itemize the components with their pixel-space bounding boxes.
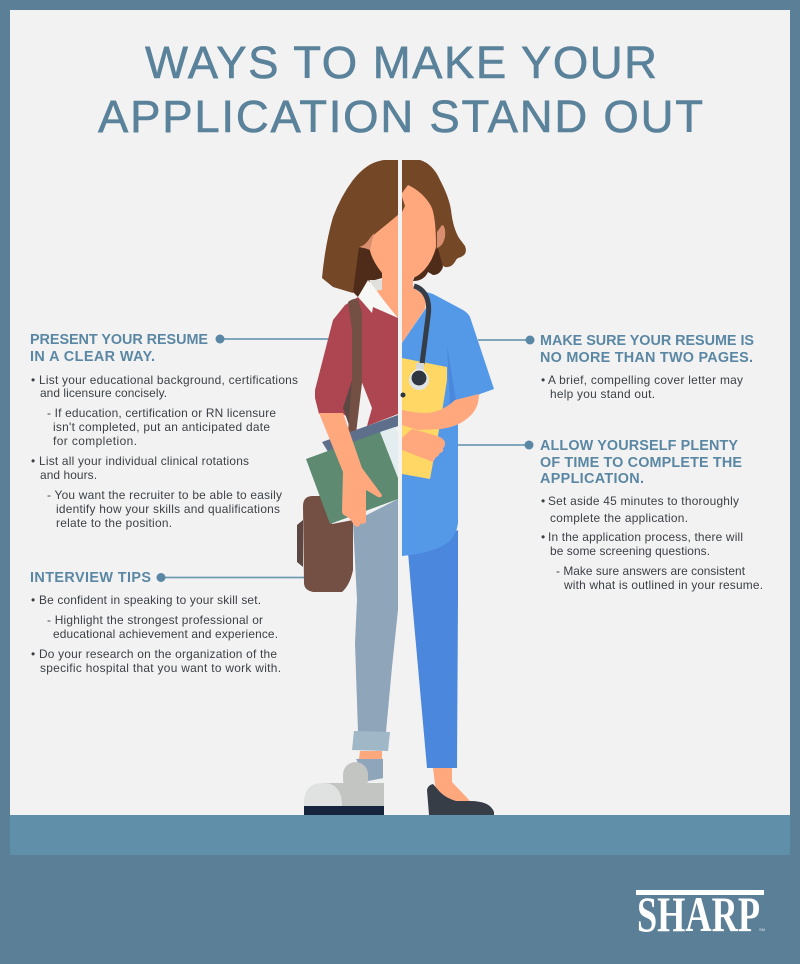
- text block: present your resume: and hours.: [40, 468, 97, 482]
- ear: [437, 225, 445, 248]
- face and neck: [402, 185, 436, 343]
- connector: interview tips: [156, 573, 304, 582]
- hair lock: [402, 197, 405, 212]
- text block: interview tips: •: [31, 593, 35, 607]
- connector: two pages: [478, 336, 534, 344]
- text block: plenty of time: APPLICATION.: [540, 471, 644, 487]
- scrub top: [402, 288, 494, 556]
- text block: present your resume: [30, 332, 298, 530]
- text block: present your resume: identify how your skills and qualifications: [56, 502, 280, 516]
- text block: interview tips: educational achievement and experience.: [53, 627, 278, 641]
- student half: [297, 160, 398, 815]
- text block: two pages: [540, 333, 754, 401]
- text block: plenty of time: •: [541, 494, 545, 508]
- title: [98, 37, 703, 142]
- text block: interview tips: [30, 570, 281, 675]
- arm and hand: [319, 413, 382, 527]
- text block: plenty of time: Set aside 45 minutes to thoroughly: [548, 494, 739, 508]
- pants: [408, 530, 458, 768]
- text block: plenty of time: be some screening questions.: [550, 544, 710, 558]
- bag: [297, 496, 353, 592]
- text block: two pages: NO MORE THAN TWO PAGES.: [540, 350, 753, 366]
- text block: present your resume: relate to the position.: [56, 516, 172, 530]
- title: APPLICATION STAND OUT: [98, 91, 703, 142]
- text block: present your resume: •: [31, 454, 35, 468]
- text block: two pages: •: [541, 373, 545, 387]
- foot: [433, 768, 470, 806]
- text block: present your resume: isn't completed, put an anticipated date: [53, 420, 270, 434]
- text block: plenty of time: complete the application.: [550, 511, 688, 525]
- text block: interview tips: Do your research on the organization of the: [39, 647, 277, 661]
- figure: half student, half nurse: [297, 160, 494, 815]
- text block: plenty of time: ALLOW YOURSELF PLENTY: [540, 438, 738, 454]
- text block: present your resume: - You want the recruiter to be able to easily: [47, 488, 282, 502]
- text block: interview tips: specific hospital that you want to work with.: [40, 661, 281, 675]
- text block: present your resume: for completion.: [53, 434, 137, 448]
- flat shoe: [427, 784, 494, 815]
- text block: present your resume: List all your individual clinical rotations: [39, 454, 249, 468]
- text block: plenty of time: with what is outlined in your resume.: [563, 578, 763, 592]
- jeans: [353, 499, 398, 732]
- hand: [402, 429, 445, 462]
- text block: present your resume: IN A CLEAR WAY.: [30, 349, 155, 365]
- rolled cuff: [352, 731, 390, 751]
- text block: interview tips: •: [31, 647, 35, 661]
- collar: [358, 280, 397, 318]
- text block: two pages: help you stand out.: [550, 387, 655, 401]
- hair: [402, 160, 466, 267]
- connector: resume clear way: [216, 334, 332, 344]
- text block: present your resume: PRESENT YOUR RESUME: [30, 332, 208, 348]
- clipboard: [402, 358, 447, 479]
- text block: interview tips: - Highlight the strongest professional or: [47, 613, 263, 627]
- text block: interview tips: INTERVIEW TIPS: [30, 570, 151, 586]
- hair: [322, 160, 398, 293]
- books: [306, 415, 398, 524]
- logo: Sharp: SM: [759, 927, 765, 932]
- title: WAYS TO MAKE YOUR: [145, 37, 657, 88]
- text block: present your resume: and licensure concisely.: [40, 386, 167, 400]
- text block: plenty of time: In the application process, there will: [548, 530, 743, 544]
- text block: two pages: MAKE SURE YOUR RESUME IS: [540, 333, 754, 349]
- text block: plenty of time: - Make sure answers are consistent: [556, 564, 746, 578]
- floor band: [10, 815, 790, 855]
- text block: plenty of time: [540, 438, 763, 592]
- strap: [343, 299, 362, 442]
- neck and face: [369, 215, 398, 318]
- stethoscope: [409, 286, 429, 390]
- text block: plenty of time: •: [541, 530, 545, 544]
- sneaker: [304, 751, 384, 815]
- folded arm: [402, 394, 479, 430]
- text block: present your resume: - If education, certification or RN licensure: [47, 406, 276, 420]
- sweater: [315, 297, 398, 426]
- text block: interview tips: Be confident in speaking to your skill set.: [39, 593, 261, 607]
- text block: two pages: A brief, compelling cover letter may: [548, 373, 743, 387]
- text block: present your resume: •: [31, 373, 35, 387]
- text block: present your resume: List your educational background, certifications: [39, 373, 298, 387]
- connector: plenty of time: [456, 440, 534, 450]
- nurse half: [400, 160, 494, 815]
- text block: plenty of time: OF TIME TO COMPLETE THE: [540, 455, 742, 471]
